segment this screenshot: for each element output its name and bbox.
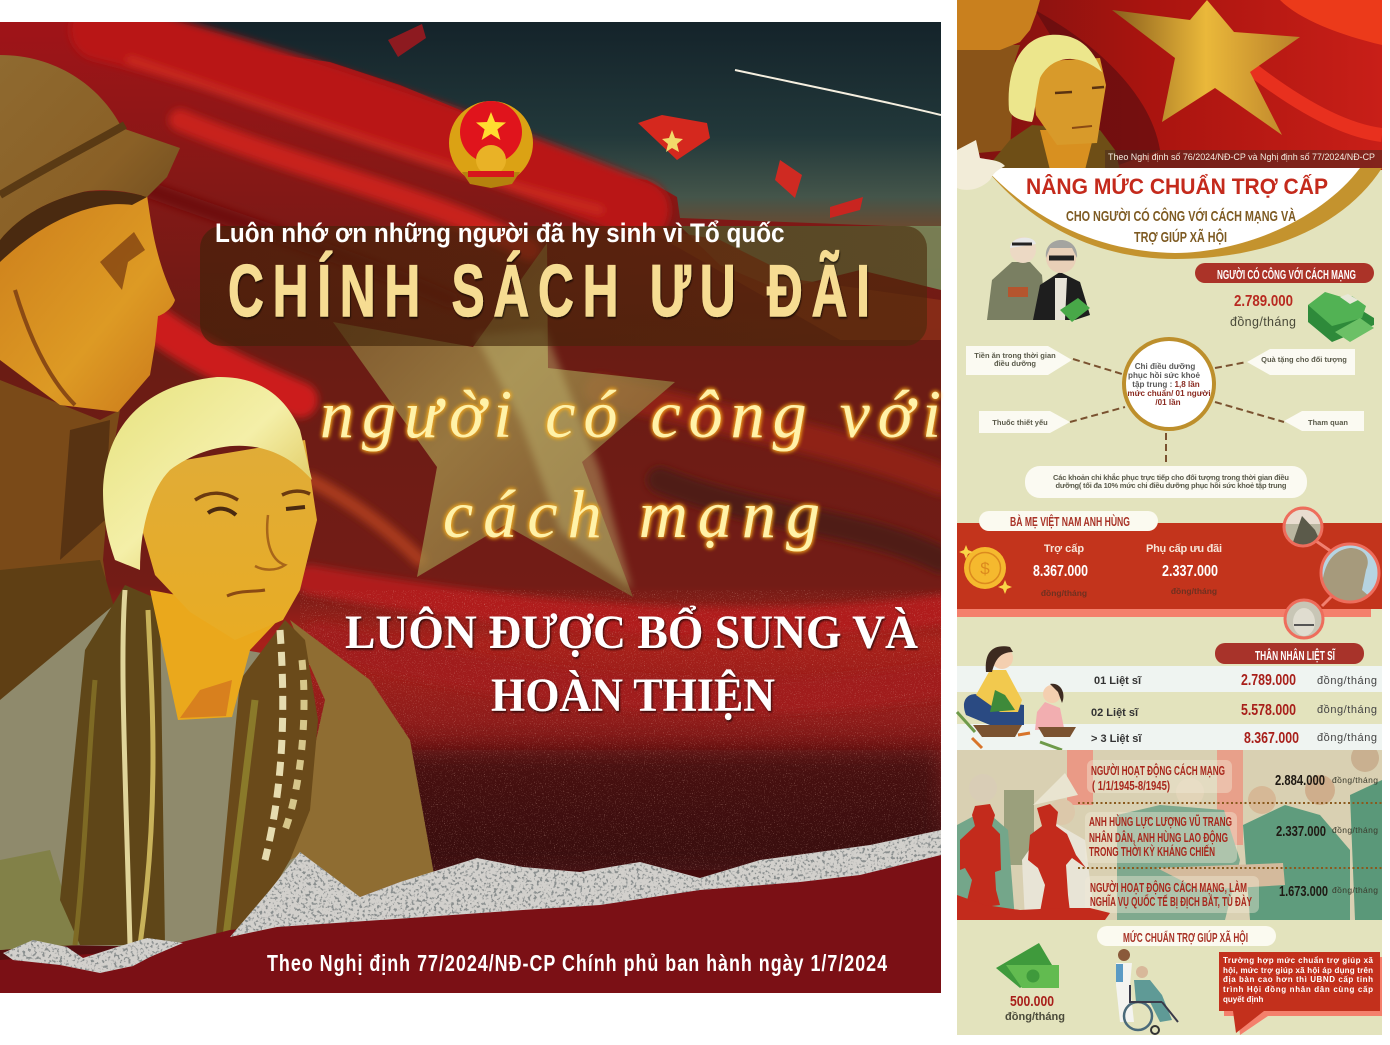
icon: elderly couple xyxy=(987,237,1090,322)
nurse head xyxy=(1118,949,1130,961)
nurse body xyxy=(1116,963,1134,1022)
paper speckle xyxy=(0,825,941,980)
row 2 label: 02 Liệt sĩ xyxy=(1091,707,1139,719)
label shape xyxy=(979,411,1070,433)
amount unit: đồng/tháng xyxy=(1230,315,1296,329)
header flag dark fold xyxy=(1035,10,1160,170)
collar patch xyxy=(180,680,232,718)
mother collar xyxy=(1055,278,1067,320)
gold arc xyxy=(985,168,1382,259)
wheel xyxy=(1124,1002,1152,1030)
white arc xyxy=(985,168,1360,253)
soldier shoulder xyxy=(0,560,113,700)
infographic title: NÂNG MỨC CHUẨN TRỢ CẤP xyxy=(1026,174,1328,199)
coin symbol: $ xyxy=(980,559,990,578)
title: chính sách ưu đãi: CHÍNH SÁCH ƯU ĐÃI xyxy=(228,249,870,332)
mother glasses xyxy=(1049,256,1074,260)
mother hair xyxy=(1046,240,1077,258)
basket 1 xyxy=(973,725,1022,737)
mother trousers xyxy=(964,694,1024,725)
panel: main poster xyxy=(0,22,941,993)
panel: mức chuẩn trợ giúp xã hội xyxy=(996,926,1382,1035)
trợ cấp value: 8.367.000 xyxy=(1033,563,1088,580)
circle text: /01 lần xyxy=(1155,398,1181,407)
header woman face xyxy=(1030,58,1106,145)
woman face xyxy=(125,440,317,640)
header flag streak xyxy=(1240,60,1382,135)
photo wall xyxy=(957,750,1382,920)
row 3 label: > 3 Liệt sĩ xyxy=(1091,733,1142,745)
back note xyxy=(996,943,1052,988)
woman brow and eyes xyxy=(195,491,310,500)
box region flag fold xyxy=(680,226,941,290)
pill label: MỨC CHUẨN TRỢ GIÚP XÃ HỘI xyxy=(1123,930,1248,945)
small flying flag 3 xyxy=(775,160,802,198)
scarf right highlights xyxy=(225,630,304,945)
panel: veterans photo xyxy=(957,744,1382,920)
trợ cấp label: Trợ cấp xyxy=(1044,543,1084,555)
soldier collar shadow xyxy=(60,420,110,560)
icon: nurse and wheelchair xyxy=(1116,949,1178,1034)
couple money xyxy=(1060,298,1090,322)
paper base xyxy=(3,830,941,973)
nurse sleeve xyxy=(1116,964,1123,982)
infographic background xyxy=(957,0,1382,1035)
label shape xyxy=(966,346,1072,375)
central figure xyxy=(1117,805,1240,920)
officer cap xyxy=(1033,773,1078,805)
label: thuốc thiết yếu xyxy=(979,411,1070,433)
group 3 unit: đồng/tháng xyxy=(1332,885,1378,895)
header woman hair xyxy=(1009,35,1102,122)
soldier figure xyxy=(0,55,180,720)
red banner right xyxy=(1217,750,1243,845)
phụ cấp label: Phụ cấp ưu đãi xyxy=(1146,543,1222,555)
silhouette 2 xyxy=(1028,804,1086,912)
hat brim shadow xyxy=(0,191,147,262)
text plate 3 xyxy=(1085,876,1259,913)
phụ cấp value: 2.337.000 xyxy=(1162,563,1218,580)
text plate 2 xyxy=(1085,812,1237,863)
officer white uniform xyxy=(1022,820,1095,920)
green uniform mid xyxy=(1243,805,1350,920)
green uniform right xyxy=(1350,780,1382,920)
pill label: BÀ MẸ VIỆT NAM ANH HÙNG xyxy=(1010,514,1130,529)
portrait 3 xyxy=(1285,600,1323,638)
trợ cấp unit: đồng/tháng xyxy=(1041,588,1087,598)
dark speckled ground xyxy=(330,750,941,870)
group 1 value: 2.884.000 xyxy=(1275,772,1325,789)
veteran glasses xyxy=(1012,242,1032,246)
woman hair xyxy=(103,377,312,570)
child hair xyxy=(1050,684,1064,703)
mother hair xyxy=(986,646,1013,672)
label shape xyxy=(1284,411,1364,431)
veteran hair xyxy=(1010,238,1036,248)
label text: điều dưỡng xyxy=(994,359,1036,368)
soldier ear strap xyxy=(15,290,75,405)
emblem cog xyxy=(476,145,506,171)
soldier body xyxy=(0,380,120,580)
veteran medals xyxy=(1008,287,1028,297)
icon: dove xyxy=(957,140,1005,190)
group 2 text: ANH HÙNG LỰC LƯỢNG VŨ TRANG xyxy=(1089,814,1232,829)
callout text: hội, mức trợ giúp xã hội áp dụng trên xyxy=(1223,966,1373,975)
note: other direct costs xyxy=(1025,466,1307,498)
woman nose xyxy=(255,515,285,570)
small flying flag 1 xyxy=(388,24,426,57)
label: tham quan xyxy=(1284,411,1364,431)
child xyxy=(1035,702,1064,730)
pill: người có công xyxy=(1195,263,1374,283)
script heading line 1: người có công với xyxy=(320,376,941,452)
phụ cấp unit: đồng/tháng xyxy=(1171,586,1217,596)
officer head xyxy=(1049,799,1075,825)
heading: remembrance line: Luôn nhớ ơn những người đã hy sinh vì Tổ quốc xyxy=(215,219,785,249)
white sky streak xyxy=(735,70,941,115)
dark red bottom band xyxy=(0,850,941,993)
red banner left xyxy=(1067,750,1093,805)
circle text: phục hồi sức khoẻ xyxy=(1128,371,1200,380)
header caption: Theo Nghị định số 76/2024/NĐ-CP và Nghị định số 77/2024/NĐ-CP xyxy=(1108,152,1375,162)
circle text xyxy=(1127,362,1211,407)
script heading line 2: cách mạng xyxy=(443,476,820,552)
woman shirt olive side xyxy=(0,850,80,950)
value: 500.000 xyxy=(1010,993,1054,1010)
row 3 value: 8.367.000 xyxy=(1244,730,1299,747)
label: tiền ăn xyxy=(966,346,1072,375)
woman scarf left xyxy=(60,585,165,945)
group 3 text xyxy=(1090,880,1252,909)
small flying flag 2 xyxy=(638,115,710,160)
icon: gold coin xyxy=(959,545,1012,594)
icon: mother and child xyxy=(957,646,1076,750)
row 1 stripe xyxy=(957,666,1382,692)
row 1 value: 2.789.000 xyxy=(1241,672,1296,689)
carrots and leaves xyxy=(972,733,1030,748)
infographic subtitle 1: CHO NGƯỜI CÓ CÔNG VỚI CÁCH MẠNG VÀ xyxy=(1066,207,1296,225)
group 2 text: TRONG THỜI KỲ KHÁNG CHIẾN xyxy=(1089,844,1215,859)
sparkle 1 xyxy=(959,545,973,559)
header flag bright fold xyxy=(1280,0,1382,45)
group 2 value: 2.337.000 xyxy=(1276,823,1326,840)
callout shadow xyxy=(1224,957,1382,1035)
dotted divider 2 xyxy=(1078,867,1382,869)
circle text: mức chuẩn/ 01 người xyxy=(1127,389,1211,398)
header star xyxy=(1112,0,1300,135)
coin disc xyxy=(964,547,1006,589)
group 2 text xyxy=(1089,814,1232,859)
portrait 2 xyxy=(1321,544,1379,604)
group 3 value: 1.673.000 xyxy=(1279,883,1328,900)
face mid xyxy=(1248,786,1276,814)
stack paper xyxy=(1340,294,1358,304)
label text: Quà tặng cho đối tượng xyxy=(1261,355,1347,364)
row 3 stripe xyxy=(957,724,1382,750)
portrait 1 xyxy=(1284,508,1322,546)
header eyes xyxy=(1055,87,1104,93)
note text xyxy=(1053,473,1289,490)
patient body xyxy=(1134,980,1172,1022)
callout text: địa bàn cao hơn thì UBND cấp tỉnh xyxy=(1223,975,1373,984)
label text: Tiền ăn trong thời gian xyxy=(974,351,1056,360)
green uniform left xyxy=(957,810,1015,920)
speckle grain xyxy=(300,590,941,870)
veteran left head xyxy=(969,774,997,802)
icon: money stack xyxy=(1308,292,1374,342)
woman mouth xyxy=(227,590,265,596)
soldier eye shadow xyxy=(100,232,145,290)
star highlight band xyxy=(475,330,632,590)
emblem star xyxy=(476,112,506,140)
footer source line: Theo Nghị định 77/2024/NĐ-CP Chính phủ ban hành ngày 1/7/2024 xyxy=(267,951,888,977)
header soldier body xyxy=(957,45,1020,155)
group 2 unit: đồng/tháng xyxy=(1332,825,1378,835)
row 1 unit: đồng/tháng xyxy=(1317,675,1377,687)
label text: Tham quan xyxy=(1308,418,1348,427)
header mouth xyxy=(1072,126,1092,128)
header flag xyxy=(957,0,1382,170)
label shape xyxy=(1247,349,1355,375)
unit: đồng/tháng xyxy=(1005,1011,1065,1023)
group 3 text: NGHĨA VỤ QUỐC TẾ BỊ ĐỊCH BẮT, TÙ ĐÀY xyxy=(1090,894,1252,909)
mother head xyxy=(1046,243,1076,273)
photo door xyxy=(1004,790,1034,865)
red band xyxy=(957,523,1382,609)
mother body xyxy=(1033,272,1090,320)
pill label: THÂN NHÂN LIỆT SĨ xyxy=(1255,648,1336,663)
title banner box xyxy=(200,226,927,346)
icon: national emblem xyxy=(449,101,533,188)
central face xyxy=(1176,778,1204,806)
group 1 text: ( 1/1/1945-8/1945) xyxy=(1092,778,1170,793)
basket 2 xyxy=(1038,727,1076,737)
note centre xyxy=(1026,970,1040,982)
subheading line 1: LUÔN ĐƯỢC BỔ SUNG VÀ xyxy=(345,604,918,659)
circle text: Chi điều dưỡng xyxy=(1135,362,1195,371)
old woman figure xyxy=(0,377,435,950)
portrait connectors xyxy=(1316,541,1332,606)
scarf left highlights xyxy=(75,590,153,945)
row 3 unit: đồng/tháng xyxy=(1317,732,1377,744)
circle text: tập trung : 1,8 lần xyxy=(1132,380,1200,389)
text plate 1 xyxy=(1087,760,1232,793)
subheading line 2: HOÀN THIỆN xyxy=(491,668,775,722)
night sky xyxy=(130,22,941,228)
soldier hat xyxy=(0,55,180,240)
label: quà tặng xyxy=(1247,349,1355,375)
callout text: trình Hội đồng nhân dân cùng cấp xyxy=(1223,985,1373,994)
callout text xyxy=(1223,956,1374,1004)
face right xyxy=(1305,775,1335,805)
mother head xyxy=(991,647,1013,669)
woman scarf right xyxy=(215,620,318,945)
group 1 unit: đồng/tháng xyxy=(1332,775,1378,785)
emblem wreath xyxy=(449,101,533,176)
circle ring xyxy=(1124,339,1214,429)
face far right xyxy=(1351,744,1379,772)
icon: banknotes xyxy=(996,943,1059,988)
panel: infographic xyxy=(957,0,1382,1035)
pill xyxy=(1097,926,1276,946)
dotted divider 1 xyxy=(1078,802,1382,804)
stack side xyxy=(1308,300,1374,342)
soldier face xyxy=(0,195,175,412)
woman eyes xyxy=(208,507,305,515)
mother shirt xyxy=(976,670,1022,712)
small wheel xyxy=(1151,1026,1159,1034)
amount: 2.789.000 xyxy=(1234,293,1293,310)
group 1 text xyxy=(1091,763,1225,793)
box right fold xyxy=(640,226,941,340)
veteran body xyxy=(987,262,1046,320)
front note xyxy=(1006,965,1059,988)
label text xyxy=(974,351,1056,368)
emblem red disc xyxy=(460,101,522,163)
header woman neck xyxy=(1040,130,1095,170)
sparkle 2 xyxy=(998,580,1012,594)
salmon strip xyxy=(957,609,1371,617)
note pill xyxy=(1025,466,1307,498)
central circle xyxy=(1124,339,1214,429)
stack front xyxy=(1335,318,1374,342)
label text: Thuốc thiết yếu xyxy=(992,418,1048,427)
row 2 unit: đồng/tháng xyxy=(1317,704,1377,716)
group 3 text: NGƯỜI HOẠT ĐỘNG CÁCH MẠNG, LÀM xyxy=(1090,880,1247,895)
veteran head xyxy=(1010,237,1036,263)
infographic subtitle 2: TRỢ GIÚP XÃ HỘI xyxy=(1134,228,1227,246)
flag highlights xyxy=(100,30,941,697)
vegetable xyxy=(990,690,1015,712)
silhouette 1 xyxy=(960,804,1001,908)
patient head xyxy=(1136,966,1148,978)
emblem base xyxy=(462,172,520,188)
coin inner ring xyxy=(970,552,1000,584)
panel: bà mẹ việt nam anh hùng xyxy=(957,508,1382,638)
silhouette ground xyxy=(957,895,1110,920)
handshake xyxy=(1157,863,1285,890)
header soldier face xyxy=(957,0,1040,50)
header image xyxy=(957,0,1382,170)
faded flag star xyxy=(333,243,675,597)
stack top xyxy=(1308,292,1366,326)
child head xyxy=(1043,685,1061,703)
pill xyxy=(1215,643,1364,664)
group 1 text: NGƯỜI HOẠT ĐỘNG CÁCH MẠNG xyxy=(1091,763,1225,778)
callout text: quyết định xyxy=(1223,995,1264,1004)
chair frame xyxy=(1130,985,1178,1022)
torn paper strip xyxy=(0,825,941,980)
woman neck xyxy=(150,590,283,720)
grass xyxy=(957,712,1062,750)
note text: Các khoản chi khắc phục trực tiếp cho đối tượng trong thời gian điều xyxy=(1053,473,1289,482)
row 2 value: 5.578.000 xyxy=(1241,702,1296,719)
pill xyxy=(979,511,1158,531)
dashed connectors xyxy=(1070,359,1284,465)
callout text: Trường hợp mức chuẩn trợ giúp xã xyxy=(1223,956,1374,965)
callout body xyxy=(1219,952,1380,1033)
callout xyxy=(1219,952,1382,1035)
poster background xyxy=(0,22,941,993)
row 1 label: 01 Liệt sĩ xyxy=(1094,675,1142,687)
woman shawl xyxy=(290,620,435,897)
panel: thân nhân liệt sĩ xyxy=(957,643,1382,750)
woman shirt xyxy=(0,600,310,950)
hat band xyxy=(0,125,125,195)
emblem ribbon xyxy=(468,171,514,177)
group 2 text: NHÂN DÂN, ANH HÙNG LAO ĐỘNG xyxy=(1089,830,1228,845)
header caption strip xyxy=(1105,150,1382,168)
small flying flag 4 xyxy=(830,197,863,218)
note text: dưỡng( tối đa 10% mức chi điều dưỡng phục hồi sức khoẻ tập trung xyxy=(1056,481,1287,490)
header woman body xyxy=(985,125,1120,170)
